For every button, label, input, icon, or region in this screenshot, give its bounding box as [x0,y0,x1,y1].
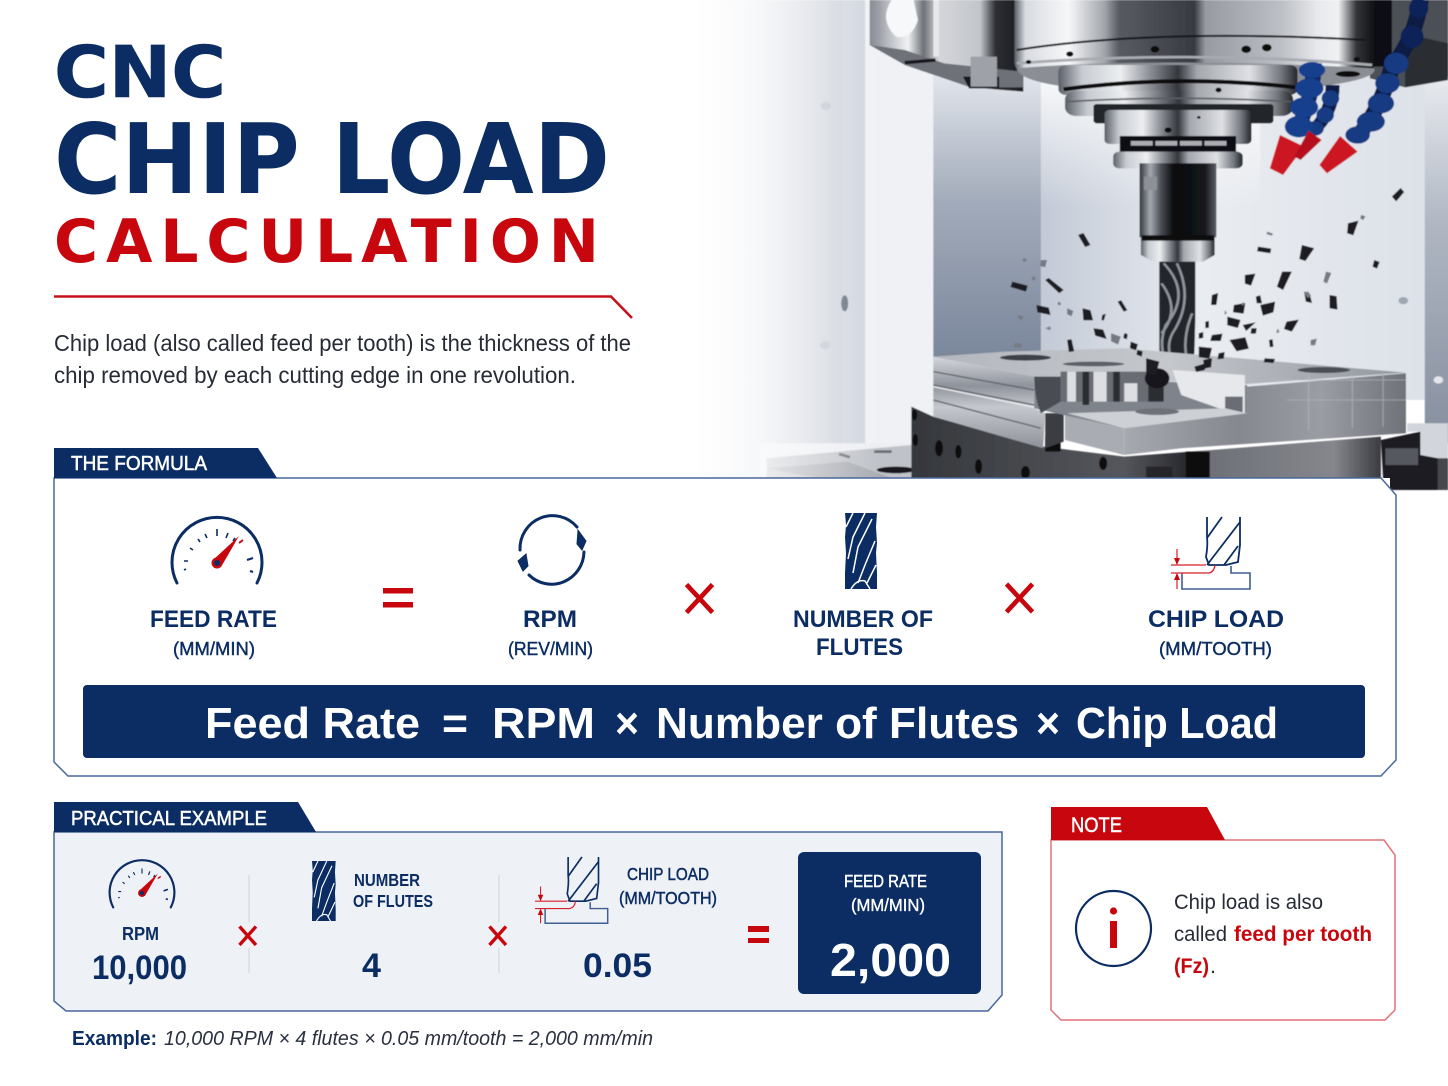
label: rpm: RPM [523,606,577,633]
value: chip load: (MM/TOOTH) [619,888,717,908]
equals sign [748,926,769,943]
note text: (Fz) [1174,954,1209,978]
intro paragraph: chip removed by each cutting edge in one revolution. [54,362,576,388]
icon: flutes small [312,861,336,921]
coolant hoses and nozzles [1270,0,1428,175]
title underline [54,296,632,318]
value: chip load [583,864,717,985]
title: CALCULATION [54,207,599,277]
note tab [1051,807,1225,840]
formula bar: = [442,699,468,748]
icon: chip load [1171,517,1250,589]
formula bar: Number of Flutes [656,699,1019,748]
formula tab: THE FORMULA [71,453,208,475]
label: chip load [1148,606,1284,659]
intro paragraph: Chip load (also called feed per tooth) is the thickness of the [54,330,631,356]
label: rpm [508,606,593,659]
label: number of flutes: FLUTES [816,634,903,661]
end mill [1159,262,1195,372]
value: number of flutes: 4 [362,947,381,985]
result box: feed rate [798,852,981,994]
panel: the formula [54,448,1396,776]
result box: feed rate: 2,000 [830,934,951,986]
icon: chip load small [535,857,608,923]
value: number of flutes [353,870,433,985]
icon: feed rate gauge [172,517,262,583]
example sentence: Example: [72,1028,157,1050]
value: rpm: 10,000 [92,949,187,987]
machine vise base [911,407,1448,490]
value: number of flutes: NUMBER [354,870,420,890]
value: rpm [92,924,187,987]
photo: CNC spindle milling a workpiece [690,0,1448,492]
note text: called [1174,922,1227,946]
formula bar: Chip Load [1076,699,1278,748]
milled workpiece [933,348,1406,455]
note text: Chip load is also [1174,890,1323,914]
formula bar: × [615,699,639,748]
flying metal chips [1011,188,1404,375]
example sentence: 10,000 RPM × 4 flutes × 0.05 mm/tooth = 2,000 mm/min [164,1028,653,1050]
formula bar: Feed Rate [205,699,420,748]
label: chip load: (MM/TOOTH) [1159,639,1272,659]
value: chip load: 0.05 [583,947,652,985]
note text: feed per tooth [1234,922,1372,946]
value: chip load: CHIP LOAD [627,864,709,884]
title: CHIP LOAD [54,103,610,216]
label: feed rate [150,606,277,659]
example tab [54,802,316,832]
label: chip load: CHIP LOAD [1148,606,1284,633]
spindle head [1015,0,1375,168]
machine enclosure backdrop [699,0,1448,480]
result box: feed rate: FEED RATE [844,871,927,891]
panel: note [1051,807,1395,1020]
white fade of photo into page [690,0,880,478]
multiply sign [1006,584,1032,612]
value: number of flutes: OF FLUTES [353,891,433,911]
formula bar: × [1036,699,1060,748]
label: rpm: (REV/MIN) [508,639,593,659]
note tab: NOTE [1071,814,1122,837]
equals sign [383,588,413,608]
label: feed rate: FEED RATE [150,606,277,633]
icon: info [1076,891,1151,966]
title [54,31,610,277]
icon: flutes [845,513,877,589]
title: CNC [54,31,226,114]
formula tab [54,448,277,478]
note text: . [1210,954,1216,978]
tool holder [1140,163,1216,262]
result box: feed rate: (MM/MIN) [851,895,925,915]
multiply sign [686,584,712,612]
divider and multiply sign [240,875,506,973]
label: number of flutes [793,606,933,661]
panel: practical example [54,802,1002,1011]
icon: rpm gauge [110,860,174,907]
icon: rpm rotation [518,516,586,584]
intro paragraph [54,330,631,388]
example tab: PRACTICAL EXAMPLE [71,808,267,830]
value: rpm: RPM [122,924,159,944]
label: number of flutes: NUMBER OF [793,606,933,633]
formula bar: RPM [492,699,595,748]
right machine housing [1370,0,1448,87]
formula bar [83,685,1365,758]
note text [1174,890,1372,978]
label: feed rate: (MM/MIN) [173,639,255,659]
left lower table [767,445,915,478]
left machine block [870,0,1023,92]
